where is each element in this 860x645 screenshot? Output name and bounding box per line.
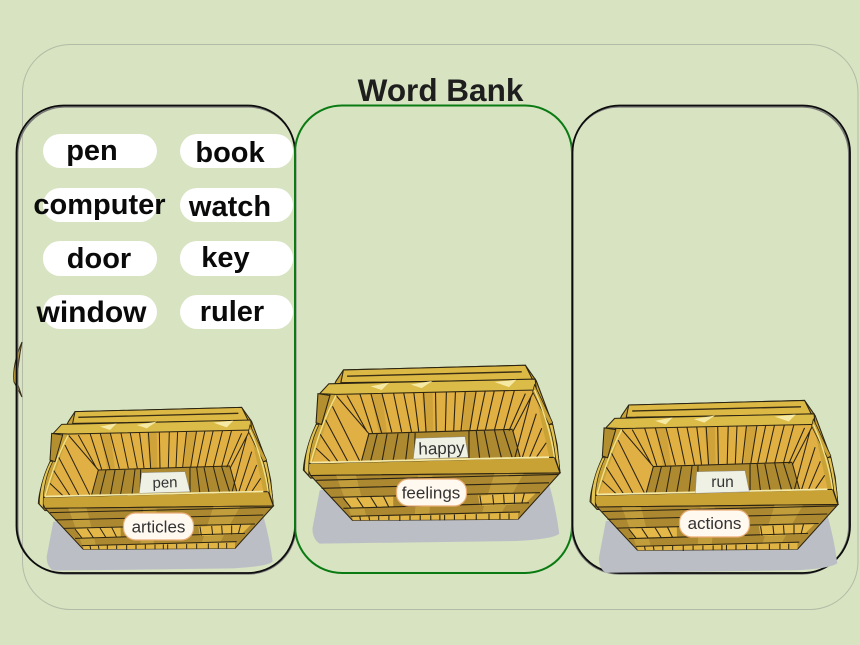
basket: actions: actions (688, 514, 741, 533)
word card: watch: watch (188, 191, 271, 223)
panel: articles column (16, 106, 296, 574)
basket: feelings (303, 365, 560, 544)
word card: key (180, 241, 293, 276)
basket: actions (590, 400, 838, 573)
word card: book (180, 134, 293, 169)
word card: pen (43, 134, 157, 168)
panel: actions column (572, 106, 850, 574)
basket: actions: run (711, 474, 734, 491)
word card: pen: pen (66, 135, 118, 167)
word card: ruler (180, 295, 293, 329)
basket: articles: pen (152, 474, 178, 492)
title: Word Bank (358, 72, 524, 108)
clipped basket fragment at left edge (14, 342, 22, 397)
word card: key: key (201, 242, 250, 274)
basket: feelings: feelings (402, 484, 460, 502)
word card: door (43, 241, 157, 276)
basket: feelings: happy (418, 438, 465, 459)
word card: book: book (195, 137, 266, 169)
word card: window: window (36, 296, 147, 329)
basket: articles (38, 407, 273, 571)
word card: ruler: ruler (200, 296, 264, 328)
word card: computer: computer (33, 189, 166, 221)
word card: door: door (67, 243, 131, 275)
basket: articles: articles (132, 518, 185, 536)
panel: feelings column (295, 106, 572, 573)
word card: watch (180, 188, 293, 223)
